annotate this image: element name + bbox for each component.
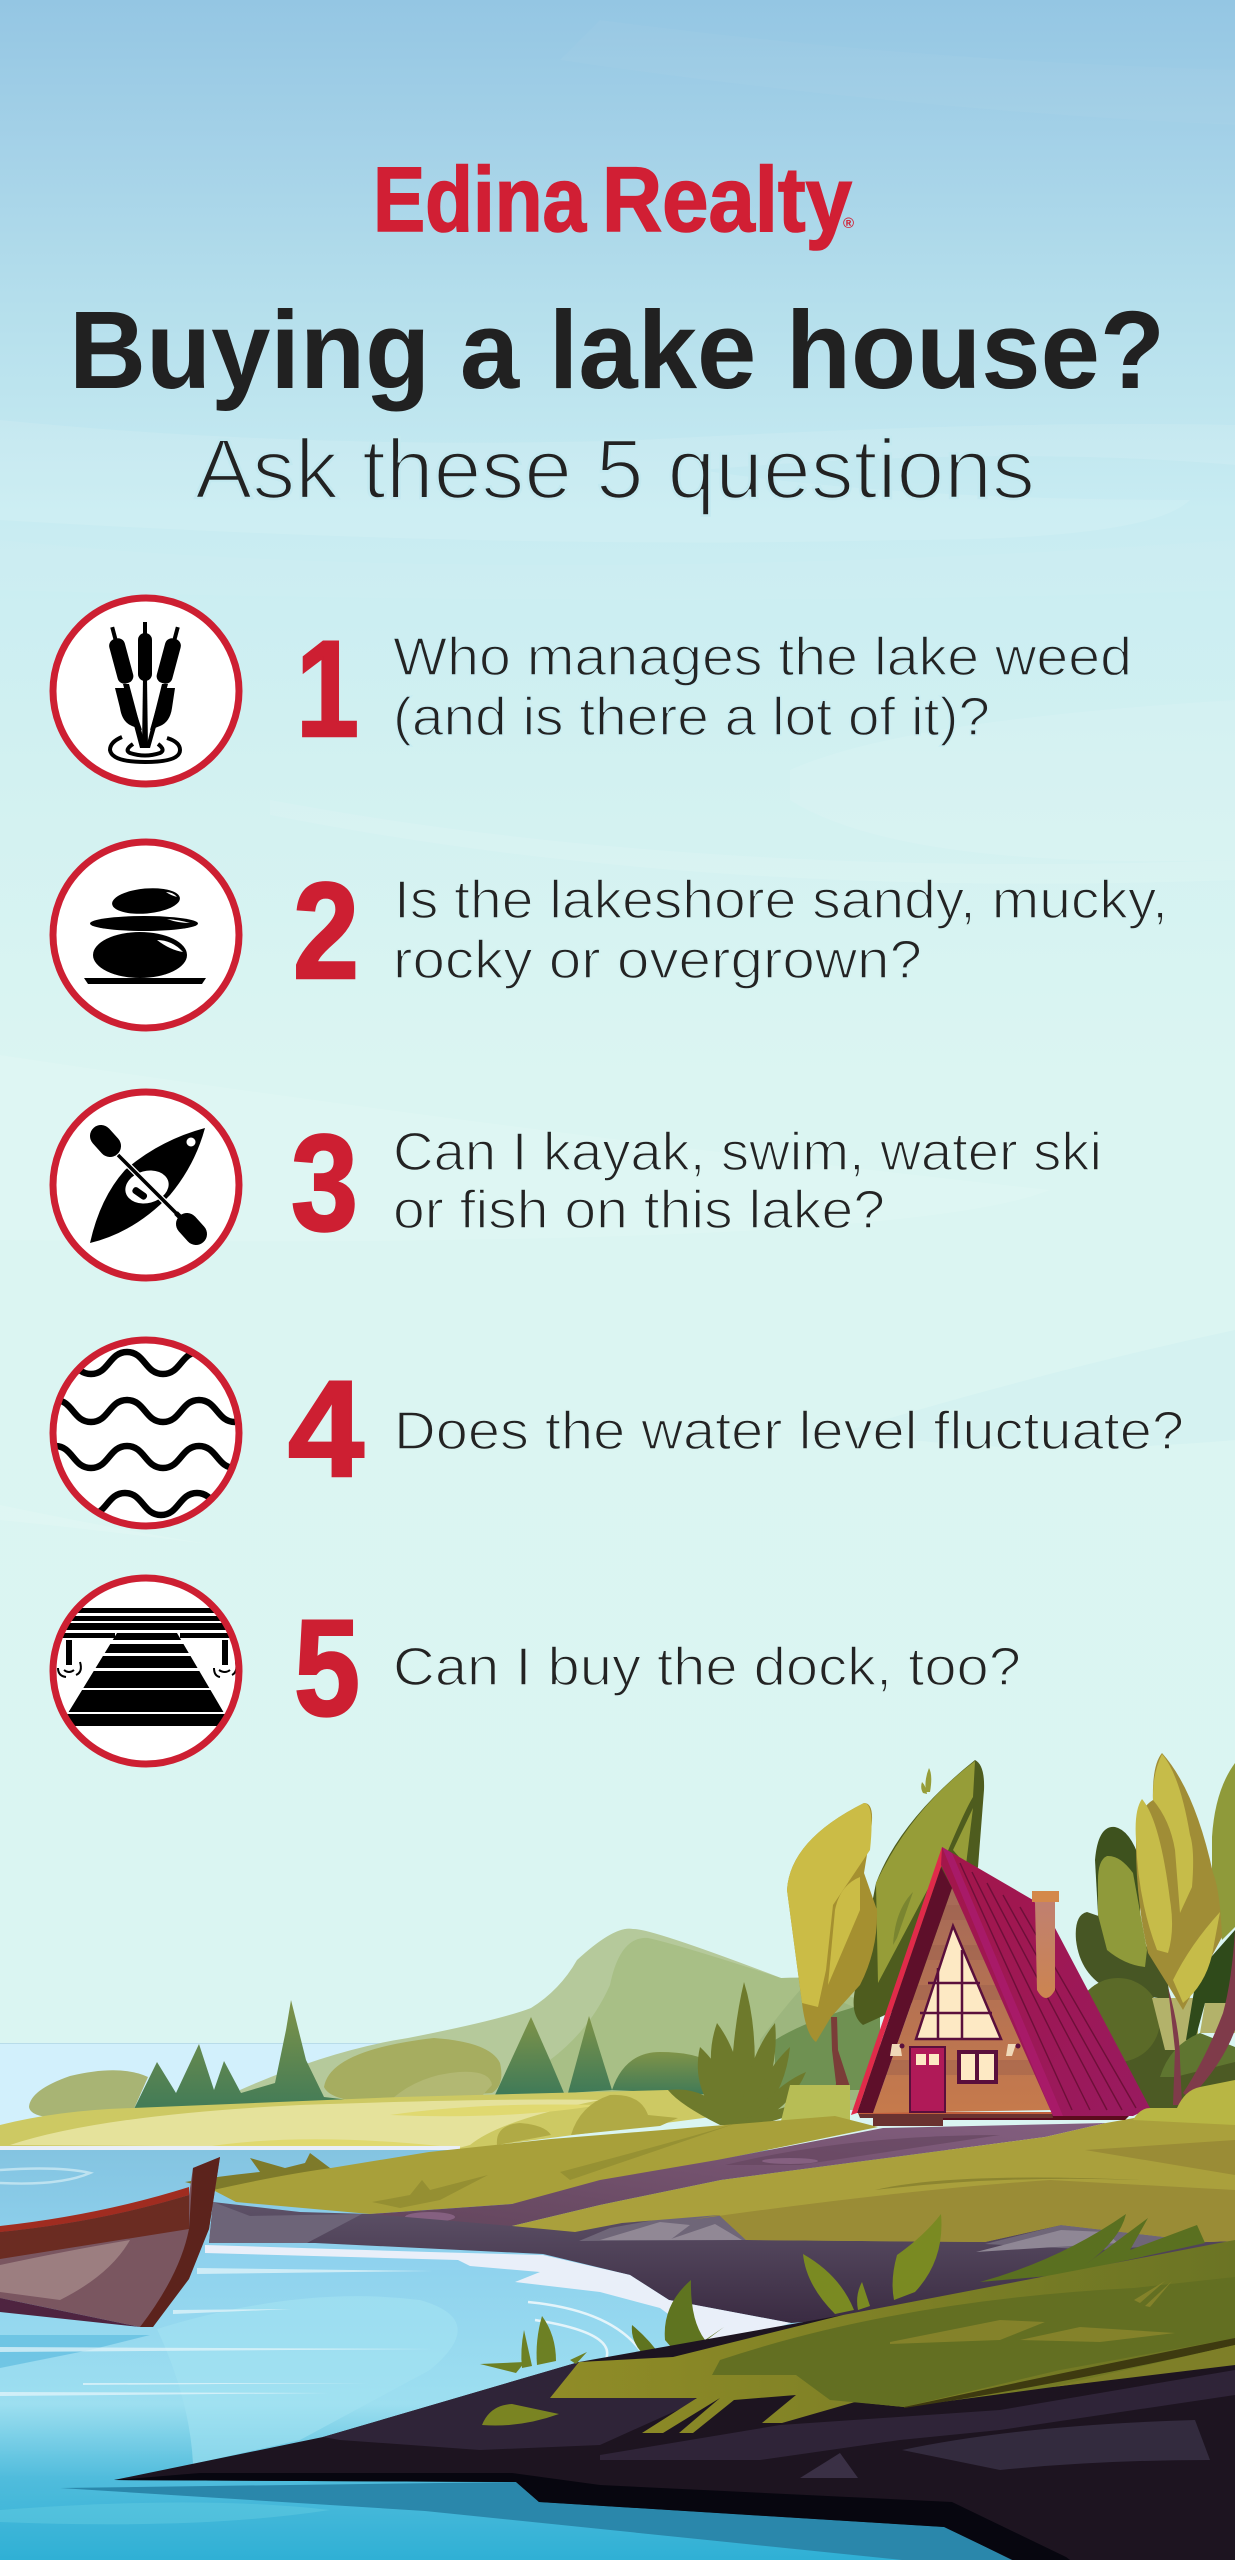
pines left [133,2000,367,2114]
logo: Edina Realty [373,149,854,251]
question 3 row [53,1092,1102,1278]
attic window [916,1926,1001,2039]
right green blobs [1076,1827,1235,2110]
icon: waves [17,1340,239,1526]
wall lamps [890,2044,1020,2056]
far lake [0,2043,460,2153]
question 5 text: Can I buy the dock, too? [393,1637,1021,1697]
title: Buying a lake house? [69,289,1165,412]
hill bushes [324,2038,501,2102]
lake landscape illustration [0,1753,1235,2560]
gray boulder left [579,2215,746,2241]
subtitle: Ask these 5 questions [195,422,1035,516]
far left bush [29,2070,148,2118]
trees behind the house [787,1753,1235,2115]
front plants on rock band [632,2214,1205,2360]
red trim [851,1847,946,2115]
dark eave [857,1867,952,2113]
question 1 text: Who manages the lake weed [393,627,1132,687]
beach rocks [497,2095,678,2145]
foam [205,2245,791,2350]
side window [957,2050,998,2084]
wall [873,1888,1052,2113]
dark foreground rock [114,2300,1235,2560]
question 4 text: Does the water level fluctuate? [394,1401,1184,1461]
icon: balanced stones [53,842,239,1028]
right grass bank [512,2100,1235,2242]
left yellow tree [787,1803,877,2042]
icon: kayak and paddle [53,1092,239,1278]
question 3 text: or fish on this lake? [393,1180,885,1240]
icon: dock [40,1578,260,1764]
question 1 row [53,598,1132,784]
number 5: 5 [294,1592,360,1745]
far right leaf [1212,1763,1235,1940]
question 1 text [393,627,1132,747]
question 2 text: rocky or overgrown? [393,930,922,990]
reeds on the left shore [480,2316,587,2373]
front grass [482,2240,1235,2433]
question 4 row [17,1340,1184,1526]
rock band [209,2202,1235,2323]
number 2: 2 [293,855,359,1008]
a-frame house [851,1847,1150,2126]
pines right [495,2016,720,2095]
gray boulder right [985,2225,1207,2250]
question 1 text: (and is there a lot of it)? [393,687,990,747]
door [910,2047,945,2112]
question 2 text: Is the lakeshore sandy, mucky, [394,870,1168,930]
yellow ground behind house [780,2085,850,2125]
green tree [854,1760,984,2025]
icon: cattails [53,598,239,784]
question 5 row [40,1578,1021,1764]
wooden boat [0,2157,220,2327]
mountains [240,1929,880,2110]
beach [0,2090,711,2150]
deck [858,2112,1133,2126]
left yellow tree trunk [831,2017,850,2115]
fern [668,1982,819,2127]
logo: Edina Realty: Realty [602,149,852,251]
water [0,2146,1235,2560]
left grass bank [185,2116,878,2214]
question 3 text [393,1122,1102,1240]
number 4: 4 [288,1353,364,1506]
number 1: 1 [296,613,359,766]
logo: Edina Realty: Edina [373,149,587,251]
roof [941,1847,1150,2116]
right tree trunks [1168,1930,1235,2105]
question 2 row [53,842,1168,1028]
number 3: 3 [291,1107,358,1260]
question 2 text [393,870,1168,990]
dirt path [307,2123,1106,2244]
question 3 text: Can I kayak, swim, water ski [393,1122,1102,1182]
logo: Edina Realty: ® [843,215,854,232]
yellow right tree [1136,1753,1222,2010]
chimney [1032,1891,1059,1998]
right mounds [1133,2080,1235,2125]
